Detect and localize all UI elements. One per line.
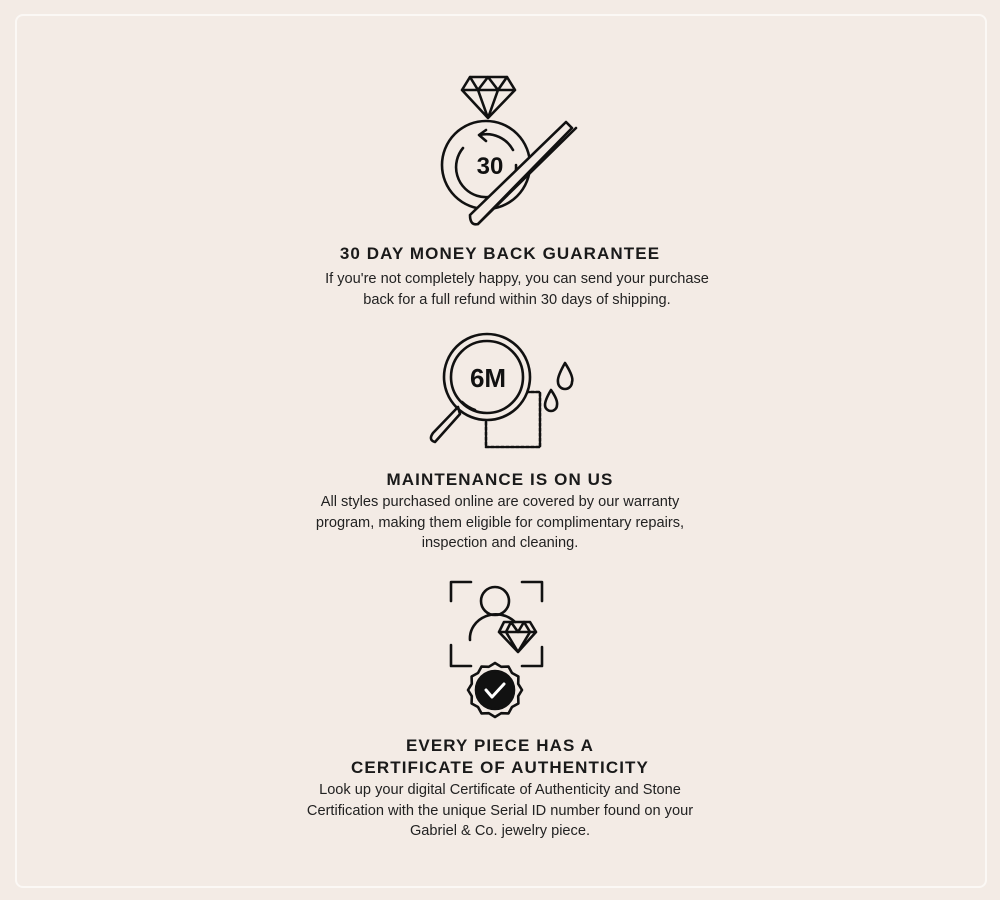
text: 30 day body: If you're not completely happy, you can send your purchase (325, 271, 709, 287)
text: maintenance body: program, making them eligible for complimentary repairs, (316, 514, 684, 530)
text: 30 day body (325, 271, 709, 308)
text: certificate body: Certification with the unique Serial ID number found on your (307, 802, 693, 818)
text: maintenance body (316, 494, 684, 551)
text: certificate body: Gabriel & Co. jewelry piece. (410, 823, 590, 839)
heading: certificate: EVERY PIECE HAS A (406, 736, 594, 755)
text: maintenance body: inspection and cleaning. (422, 535, 578, 551)
heading: certificate (351, 736, 649, 777)
heading: 30 day: 30 DAY MONEY BACK GUARANTEE (340, 244, 660, 263)
text: 30 day body: back for a full refund within 30 days of shipping. (363, 292, 671, 308)
icon: ring with 30 and tweezers: 30 (477, 153, 503, 180)
text: certificate body: Look up your digital Certificate of Authenticity and Stone (319, 782, 681, 798)
heading: certificate: CERTIFICATE OF AUTHENTICITY (351, 758, 649, 777)
text: maintenance body: All styles purchased online are covered by our warranty (321, 494, 679, 510)
icon: magnifier 6M with cloth and drops: 6M (470, 363, 506, 393)
heading: maintenance: MAINTENANCE IS ON US (387, 470, 613, 489)
text: certificate body (307, 782, 693, 839)
